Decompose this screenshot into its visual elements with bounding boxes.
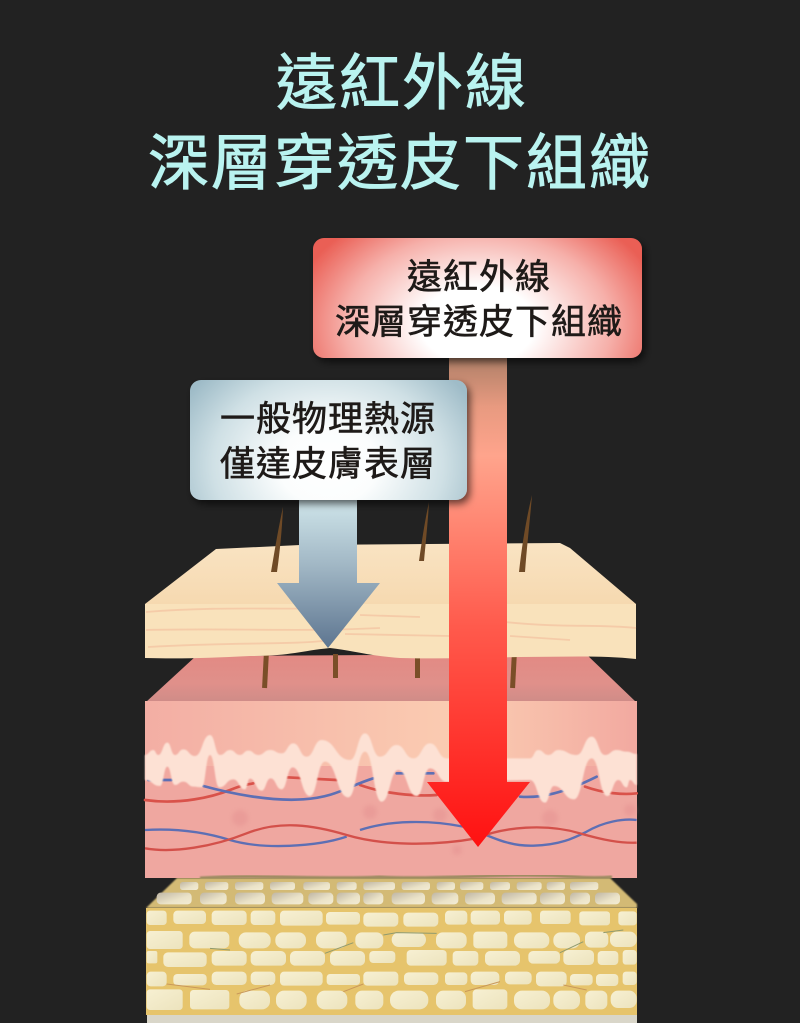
epidermis streaks — [146, 608, 636, 647]
callout: ordinary physical heat source: 僅達皮膚表層 — [220, 445, 436, 484]
callout: ordinary physical heat source: 一般物理熱源 — [220, 400, 436, 439]
skin blemishes — [232, 804, 636, 855]
dermis upper band — [145, 701, 637, 766]
epidermis front face — [145, 604, 636, 659]
title: 深層穿透皮下組織 — [148, 129, 652, 197]
title — [148, 49, 652, 197]
fat cells — [147, 882, 637, 1010]
arrow: ordinary heat source surface only — [277, 500, 380, 648]
panel: dermis layer — [145, 654, 637, 878]
arrow: far infrared deep penetration — [427, 358, 530, 847]
panel: epidermis layer — [145, 495, 636, 659]
title: 遠紅外線 — [276, 49, 528, 117]
callout: far infrared — [313, 238, 642, 358]
papillae white wave — [145, 733, 637, 803]
lower dermis tint — [145, 790, 637, 878]
callout: far infrared: 遠紅外線 — [407, 258, 551, 297]
callout: far infrared: 深層穿透皮下組織 — [335, 303, 623, 342]
upper blood vessels — [145, 773, 637, 802]
fat layer front face — [146, 908, 637, 1015]
connective tissue lines — [167, 930, 623, 994]
dermis front face — [145, 701, 637, 878]
epidermis top surface — [145, 543, 636, 610]
vessels and papillae — [145, 733, 637, 850]
callout: ordinary physical heat source — [190, 380, 467, 500]
dermis top surface — [146, 654, 636, 702]
fat boundary shadow — [200, 875, 612, 878]
lower blood vessels — [145, 820, 637, 850]
fat layer bottom edge — [147, 1015, 637, 1023]
hairs below the top layer — [262, 654, 517, 688]
panel: fat layer (subcutaneous tissue) — [146, 878, 637, 1023]
hairs above the top layer — [271, 495, 532, 572]
fat layer top surface — [146, 878, 637, 908]
